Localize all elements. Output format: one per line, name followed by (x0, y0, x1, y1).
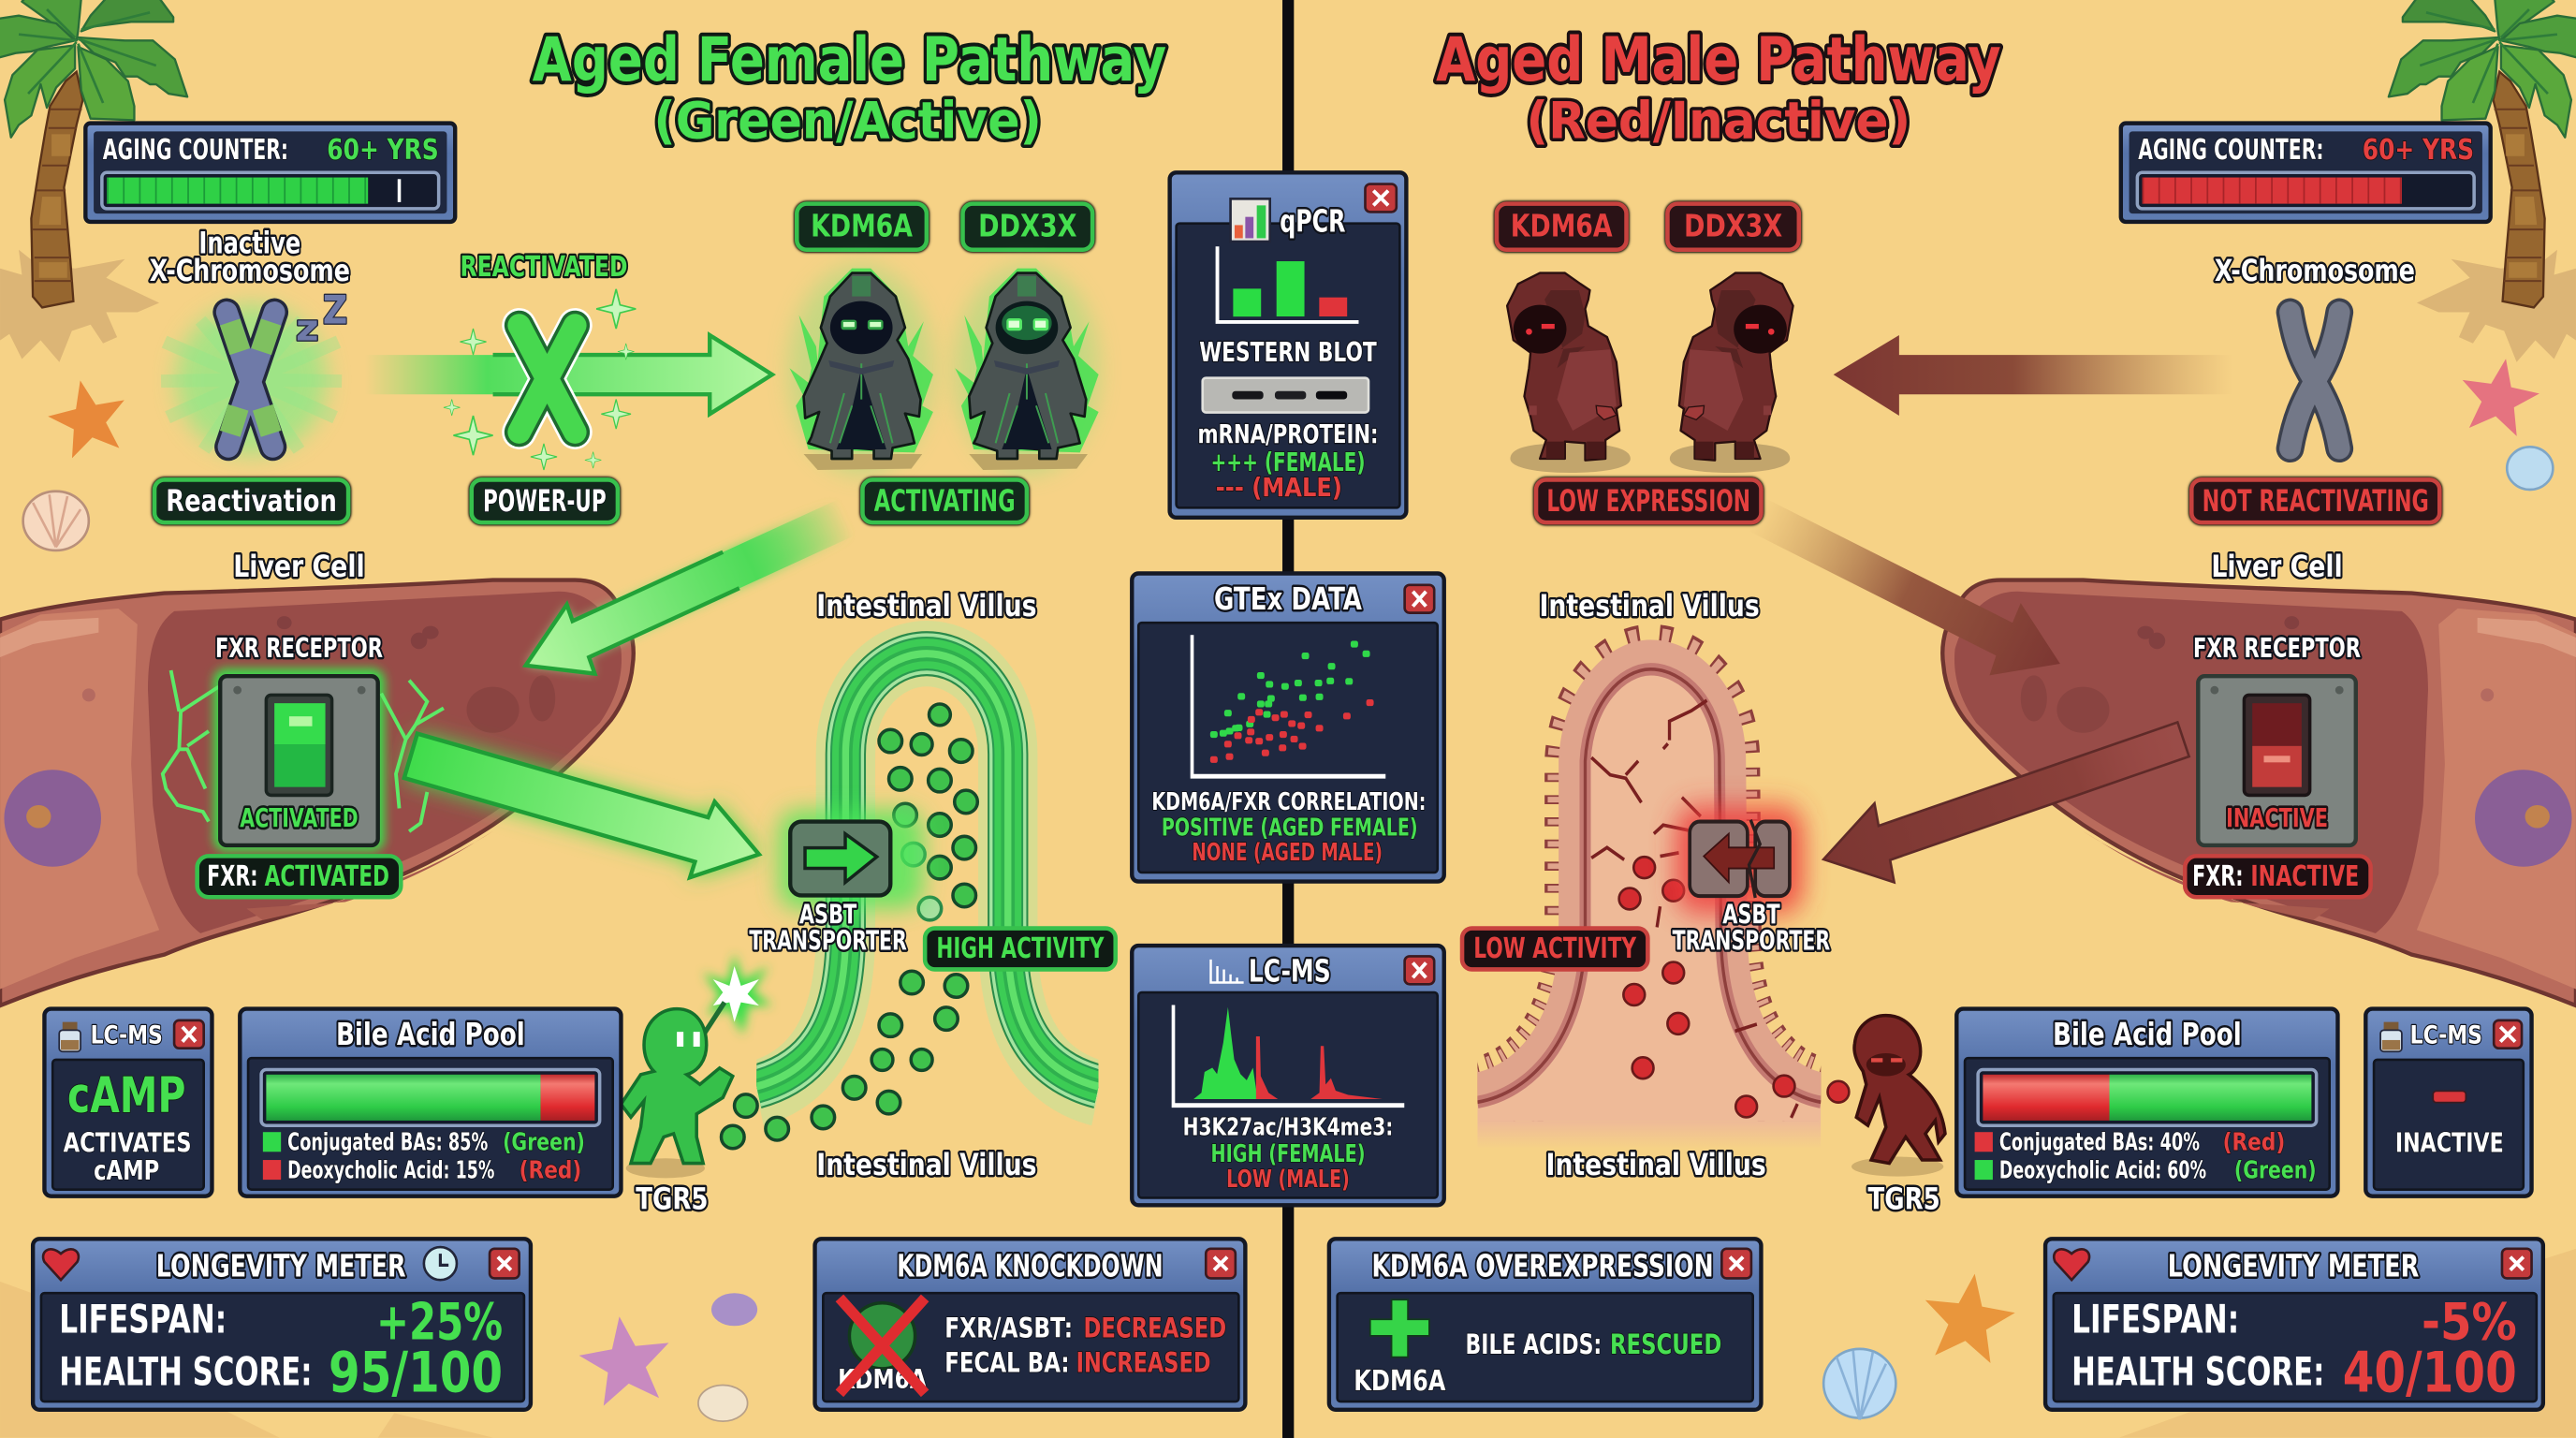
center divider (1282, 0, 1294, 1438)
chart: red bile acid particles (1619, 857, 1849, 1117)
badge: power-up (472, 479, 618, 522)
title: aged female pathway (533, 25, 1166, 150)
badge: low activity (1462, 929, 1647, 969)
labels: kdm6a and ddx3x male: KDM6A (1511, 208, 1613, 244)
panel: lc-ms center (1132, 946, 1444, 1205)
panel: bile acid pool male: Deoxycholic Acid: 60% (1999, 1155, 2206, 1183)
panel: aging counter male: 60+ YRS (2363, 134, 2474, 167)
panel: bile acid pool male: (Red) (2223, 1128, 2285, 1156)
icon: sleeping inactive x-chromosome: z (296, 307, 319, 349)
labels: kdm6a and ddx3x female: DDX3X (978, 208, 1077, 244)
panel: western blot and qpcr: WESTERN BLOT (1199, 337, 1377, 368)
label: x-chromosome male: X-Chromosome (2215, 255, 2415, 288)
panel: longevity meter female (33, 1239, 531, 1410)
chart: damaged red intestinal villus (1477, 669, 1821, 1149)
icon: crossed-out kdm6a figure (838, 1298, 927, 1395)
panel: lc-ms inactive male: LC-MS (2410, 1021, 2482, 1049)
icon: spectrum glyph (1211, 960, 1244, 983)
badge: fxr inactive: FXR: (2192, 860, 2244, 893)
panel: kdm6a knockdown: KDM6A KNOCKDOWN (897, 1248, 1164, 1284)
label: liver cell left: Liver Cell (233, 550, 365, 584)
badge: not reactivating: NOT REACTIVATING (2203, 485, 2429, 519)
chart: conjugated vs deoxycholic bar (1978, 1070, 2317, 1125)
panel: bile acid pool female: Deoxycholic Acid: 15% (287, 1155, 494, 1183)
labels: kdm6a and ddx3x female (797, 204, 1092, 250)
arrow: genes to liver green (526, 500, 855, 674)
icon: close button (2502, 1249, 2532, 1278)
title: aged male pathway: Aged Male Pathway (1436, 25, 2001, 95)
label: inactive x-chromosome (150, 227, 350, 288)
panel: lc-ms inactive male (2365, 1009, 2532, 1196)
panel: aging counter female: 60+ YRS (327, 134, 439, 167)
badge: reactivation: Reactivation (166, 485, 337, 519)
labels: kdm6a and ddx3x male: DDX3X (1684, 208, 1783, 244)
badge: activating: ACTIVATING (874, 485, 1016, 519)
icon: dim red hooded figures (1507, 273, 1793, 473)
title: aged female pathway: Aged Female Pathway (533, 25, 1166, 95)
panel: lc-ms camp female (44, 1009, 212, 1196)
badge: fxr inactive: INACTIVE (2250, 860, 2359, 893)
panel: longevity meter female: +25% (376, 1292, 503, 1351)
panel: kdm6a knockdown (815, 1239, 1245, 1410)
panel: bile acid pool male: Bile Acid Pool (2053, 1016, 2242, 1052)
panel: western blot and qpcr: mRNA/PROTEIN: (1197, 420, 1379, 449)
icon: sleeping inactive x-chromosome (161, 287, 347, 455)
decoration: beach starfish and shells (23, 352, 2553, 1421)
label: reactivated: REACTIVATED (460, 251, 627, 284)
icon: close button (1365, 184, 1397, 212)
icon: close button (490, 1249, 520, 1278)
chart: western blot bands (1203, 378, 1368, 413)
label: tgr5 right: TGR5 (1868, 1183, 1940, 1217)
panel: aging counter female (85, 124, 455, 222)
label: intestinal villus bottom left: Intestinal Villus (816, 1149, 1036, 1182)
badge: reactivation (154, 479, 348, 522)
badge: low expression (1536, 479, 1761, 522)
icon: activated fxr switch (163, 668, 444, 851)
panel: bile acid pool female (240, 1009, 621, 1196)
panel: kdm6a overexpression: RESCUED (1610, 1328, 1721, 1360)
badge: power-up: POWER-UP (483, 485, 607, 519)
panel: kdm6a knockdown: FXR/ASBT: (944, 1313, 1073, 1344)
badge: not reactivating (2191, 479, 2439, 522)
panel: bile acid pool female: Conjugated BAs: 85% (287, 1128, 488, 1156)
panel: aging counter female: AGING COUNTER: (103, 134, 288, 167)
panel: kdm6a knockdown: FECAL BA: (944, 1346, 1070, 1378)
panel: bile acid pool female: (Red) (520, 1155, 581, 1183)
panel: kdm6a overexpression: KDM6A OVEREXPRESSION (1372, 1248, 1714, 1284)
badge: low expression: LOW EXPRESSION (1546, 485, 1750, 519)
title: aged male pathway (1436, 25, 2001, 150)
icon: heart (43, 1249, 79, 1280)
icon: reactivated green x-chromosome (444, 289, 636, 470)
panel: lc-ms center: LOW (MALE) (1226, 1165, 1350, 1193)
panel: kdm6a overexpression: BILE ACIDS: (1466, 1328, 1602, 1360)
panel: gtex data: POSITIVE (AGED FEMALE) (1162, 813, 1418, 841)
panel: kdm6a overexpression: KDM6A (1354, 1365, 1445, 1398)
panel: gtex data: KDM6A/FXR CORRELATION: (1151, 787, 1426, 815)
icon: inactive fxr switch (2198, 676, 2356, 845)
labels: kdm6a and ddx3x male (1497, 204, 1799, 250)
panel: longevity meter male (2045, 1239, 2543, 1410)
label: asbt transporter left (749, 899, 907, 956)
label: asbt transporter left: ASBT (799, 899, 856, 930)
badge: high activity: HIGH ACTIVITY (936, 932, 1105, 965)
panel: longevity meter female: HEALTH SCORE: (59, 1348, 313, 1394)
badge: fxr activated: ACTIVATED (265, 860, 389, 893)
panel: gtex data (1132, 574, 1444, 882)
panel: western blot and qpcr: +++ (FEMALE) (1211, 448, 1365, 477)
arrow: fxr to asbt brown (1823, 723, 2189, 882)
panel: lc-ms camp female: ACTIVATES (64, 1127, 192, 1158)
icon: flask (59, 1022, 80, 1051)
panel: lc-ms camp female: cAMP (67, 1067, 185, 1124)
panel: longevity meter female: 95/100 (329, 1342, 503, 1406)
panel: western blot and qpcr: --- (MALE) (1216, 474, 1342, 503)
icon: cracked asbt transporter (1676, 806, 1804, 914)
panel: longevity meter male: LONGEVITY METER (2168, 1248, 2419, 1284)
panel: bile acid pool male (1956, 1009, 2337, 1196)
badge: fxr activated: FXR: (207, 860, 258, 893)
panel: lc-ms camp female: LC-MS (91, 1021, 163, 1049)
badge: high activity (925, 929, 1116, 969)
icon: sleeping inactive x-chromosome: Z (323, 287, 347, 333)
panel: bile acid pool male: (Green) (2234, 1155, 2317, 1183)
panel: liver cell male (1942, 580, 2576, 1005)
arrow: green x-chromosome to genes (365, 335, 772, 414)
label: fxr receptor right: FXR RECEPTOR (2193, 633, 2361, 664)
badge: fxr inactive (2185, 856, 2371, 897)
label: asbt transporter left: TRANSPORTER (749, 925, 907, 956)
icon: minus sign (2433, 1091, 2466, 1103)
panel: bile acid pool female: (Green) (503, 1128, 585, 1156)
badge: activating (862, 479, 1027, 522)
label: inactive x-chromosome: X-Chromosome (150, 255, 350, 288)
panel: longevity meter female: LIFESPAN: (59, 1296, 227, 1342)
icon: crossed-out kdm6a figure: KDM6A (838, 1364, 927, 1395)
panel: lc-ms camp female: cAMP (94, 1155, 159, 1186)
panel: lc-ms center: HIGH (FEMALE) (1211, 1139, 1365, 1167)
label: inactive x-chromosome: Inactive (198, 227, 300, 260)
panel: bile acid pool male: Conjugated BAs: 40% (1999, 1128, 2200, 1156)
label: asbt transporter right (1673, 899, 1830, 956)
decoration: left palm tree (0, 0, 187, 362)
label: tgr5 left: TGR5 (636, 1183, 708, 1217)
icon: close button (1405, 585, 1434, 613)
icon: red hunched tgr5 figure (1852, 1016, 1945, 1177)
title: aged male pathway: (Red/Inactive) (1526, 91, 1910, 150)
icon: flask (2380, 1022, 2402, 1051)
decoration: right palm tree (2389, 0, 2576, 362)
label: intestinal villus top left: Intestinal Villus (816, 590, 1036, 624)
panel: longevity meter male: LIFESPAN: (2071, 1296, 2239, 1342)
panel: aging counter male: AGING COUNTER: (2138, 134, 2324, 167)
icon: close button (174, 1020, 204, 1049)
labels: kdm6a and ddx3x female: KDM6A (811, 208, 913, 244)
chart: lc-ms spectrum (1173, 1005, 1404, 1106)
chart: green bile acid particles (722, 704, 977, 1149)
arrow: x-chromosome to genes brown (1834, 335, 2232, 416)
label: fxr receptor left: FXR RECEPTOR (215, 633, 383, 664)
label: liver cell right: Liver Cell (2211, 550, 2343, 584)
panel: lc-ms inactive male: INACTIVE (2395, 1127, 2504, 1158)
panel: longevity meter male: HEALTH SCORE: (2071, 1348, 2324, 1394)
panel: gtex data: NONE (AGED MALE) (1192, 838, 1383, 866)
panel: western blot and qpcr: qPCR (1280, 202, 1345, 239)
panel: lc-ms center: LC-MS (1249, 953, 1331, 990)
chart: kdm6a fxr scatter plot (1193, 635, 1385, 776)
panel: gtex data: GTEx DATA (1214, 580, 1362, 617)
badge: fxr activated (198, 856, 401, 897)
arrow: fxr to asbt green (404, 734, 759, 877)
arrow: low expression to liver brown (1748, 498, 2060, 675)
panel: western blot and qpcr (1170, 172, 1406, 518)
panel: kdm6a knockdown: INCREASED (1076, 1346, 1211, 1378)
icon: glowing green hooded figures (788, 265, 1099, 475)
icon: close button (1206, 1249, 1236, 1278)
panel: longevity meter male: 40/100 (2343, 1342, 2517, 1406)
panel: lc-ms center: H3K27ac/H3K4me3: (1183, 1113, 1393, 1141)
panel: kdm6a overexpression (1329, 1239, 1761, 1410)
icon: inactive grey x-chromosome (2291, 312, 2339, 448)
icon: activated fxr switch: ACTIVATED (240, 804, 359, 833)
icon: close button (1405, 956, 1434, 984)
label: intestinal villus bottom right: Intestinal Villus (1546, 1149, 1766, 1182)
icon: heart (2054, 1249, 2089, 1280)
icon: inactive fxr switch: INACTIVE (2226, 804, 2328, 833)
label: intestinal villus top right: Intestinal Villus (1540, 590, 1760, 624)
panel: longevity meter male: -5% (2422, 1292, 2517, 1351)
panel: kdm6a knockdown: DECREASED (1083, 1313, 1226, 1344)
label: asbt transporter right: ASBT (1722, 899, 1780, 930)
icon: green tgr5 figure with burst (621, 953, 772, 1178)
chart: green active intestinal villus (756, 653, 1098, 1093)
icon: close button (1721, 1249, 1751, 1278)
icon: green plus (1370, 1299, 1429, 1357)
panel: liver cell female (0, 580, 634, 1005)
icon: qpcr document chart (1231, 198, 1270, 242)
chart: conjugated vs deoxycholic bar (261, 1070, 600, 1125)
icon: clock (424, 1247, 457, 1280)
label: asbt transporter right: TRANSPORTER (1673, 925, 1830, 956)
panel: bile acid pool female: Bile Acid Pool (336, 1016, 525, 1052)
panel: aging counter male (2121, 124, 2491, 222)
icon: close button (2494, 1020, 2522, 1049)
chart: qpcr bars (1218, 246, 1358, 322)
icon: asbt transporter active (779, 810, 923, 909)
title: aged female pathway: (Green/Active) (654, 91, 1042, 150)
panel: longevity meter female: LONGEVITY METER (156, 1248, 406, 1284)
badge: low activity: LOW ACTIVITY (1473, 932, 1636, 965)
